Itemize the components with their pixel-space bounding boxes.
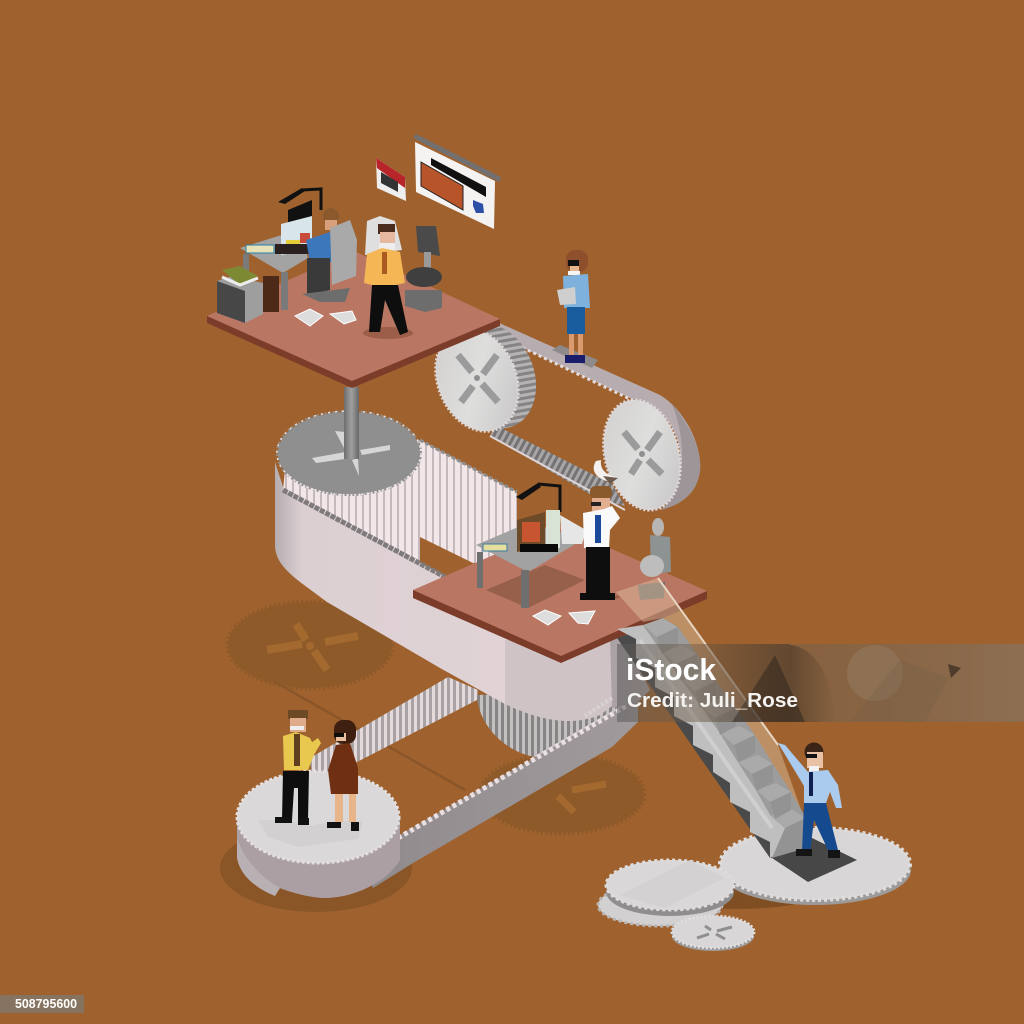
large belt pink band	[275, 462, 612, 721]
belt right cap	[610, 636, 650, 708]
shadow gear right	[480, 755, 644, 833]
watermark text: iStock	[626, 652, 717, 687]
pleats top edge	[420, 440, 517, 492]
phone icon	[594, 460, 618, 484]
papers on desk	[560, 515, 586, 544]
watermark band	[617, 644, 1024, 722]
credit text: Credit: Juli_Rose	[627, 690, 798, 712]
large belt lower pink	[505, 640, 612, 721]
pleats inside belt	[283, 440, 517, 563]
middle platform	[413, 526, 707, 663]
monitor	[275, 200, 315, 255]
person phone	[580, 486, 620, 600]
tan railing wedge	[616, 578, 806, 818]
upper belt lower edge	[490, 436, 625, 510]
small gear	[672, 916, 754, 951]
cabinet	[217, 266, 263, 323]
poster	[413, 134, 501, 229]
lower left gear stack	[598, 860, 734, 926]
lower left disc	[237, 771, 400, 898]
upper belt top teeth	[490, 332, 632, 400]
stairs	[617, 618, 806, 858]
upper belt lower teeth	[490, 423, 625, 506]
shadow gear left	[228, 602, 392, 688]
upper left gear	[421, 311, 551, 444]
large right gear	[719, 828, 911, 905]
pole	[344, 387, 359, 459]
monitor middle	[517, 510, 560, 552]
railing line	[658, 578, 778, 745]
lower belt edge	[398, 706, 626, 838]
person yellow	[275, 710, 321, 825]
woman shadow	[552, 345, 598, 368]
lower belt grey side	[360, 700, 638, 888]
image id badge: 508795600	[15, 996, 77, 1011]
server box	[365, 216, 402, 255]
lower pulley pleats	[477, 690, 630, 757]
upper belt right side shade	[660, 404, 700, 510]
calendar	[376, 158, 406, 201]
top platform	[207, 251, 500, 388]
shadow belt lines	[275, 682, 465, 790]
shadow under disc	[220, 824, 412, 912]
large belt grey edge	[283, 490, 445, 577]
person orange	[363, 224, 413, 339]
image id badge	[0, 995, 84, 1013]
upper belt top band	[487, 322, 700, 510]
lamp middle	[516, 483, 560, 512]
papers middle	[533, 610, 595, 625]
large grey gear	[277, 411, 421, 495]
person woman	[557, 250, 590, 363]
person seated	[263, 208, 357, 312]
person man on stairs	[778, 742, 842, 858]
chair right	[405, 226, 442, 312]
desk middle	[476, 522, 582, 608]
papers top	[295, 309, 356, 326]
person brown dress	[327, 720, 359, 831]
lamp	[278, 188, 321, 210]
large belt lower right grid edge	[585, 698, 612, 716]
desk top	[240, 229, 308, 310]
chair middle	[638, 518, 671, 600]
lower belt upper teeth	[310, 677, 478, 785]
upper right gear	[593, 392, 691, 518]
shadow under lower right gears	[660, 885, 810, 909]
